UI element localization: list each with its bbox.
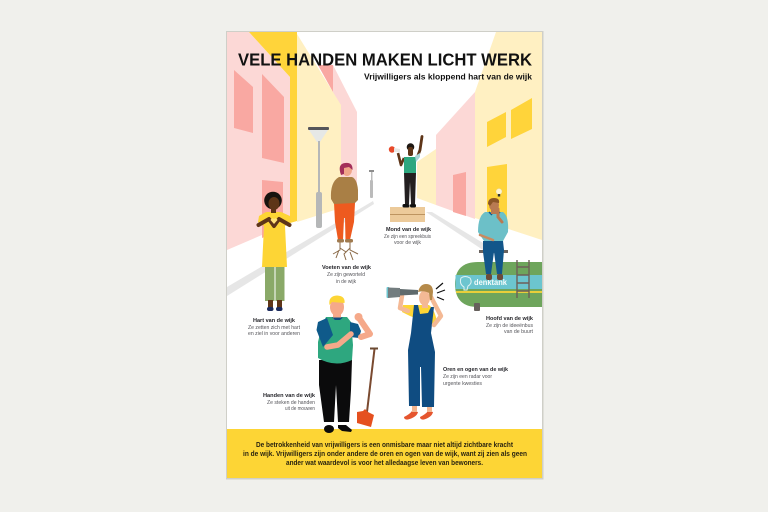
yellow line: [456, 291, 542, 293]
label: oren en ogen: [443, 367, 509, 387]
footer text: ander wat waardevol is voor het alledaagse leven van bewoners.: [286, 458, 483, 467]
label: handen: Ze steken de handen: [267, 400, 315, 406]
navy sleeves: [316, 318, 333, 347]
title: VELE HANDEN MAKEN LICHT WERK: [238, 50, 533, 70]
arm to ear: [431, 297, 441, 325]
label: handen: Handen van de wijk: [263, 393, 316, 399]
raised arm: [359, 318, 370, 337]
yellow building edge: [249, 32, 297, 223]
person: mond van de wijk: [389, 136, 425, 222]
ankles: [412, 405, 417, 412]
footer text: [243, 440, 527, 467]
label: hoofd: Hoofd van de wijk: [486, 316, 534, 322]
footer text: in de wijk. Vrijwilligers zijn onder andere de oren en ogen van de wijk, want zij zien als geen: [243, 449, 527, 458]
label: oren en ogen: Oren en ogen van de wijk: [443, 367, 509, 373]
label: hart: Ze zetten zich met hart: [248, 325, 300, 331]
shirt: [478, 212, 508, 241]
legs: [265, 266, 274, 301]
person: voeten van de wijk: [331, 163, 358, 260]
label: mond: Ze zijn een spreekbuis: [384, 234, 431, 240]
label: mond: [384, 227, 432, 246]
right curb: [426, 212, 488, 250]
tank band: [456, 275, 542, 289]
dress: [258, 212, 291, 267]
pink roof shadow: [318, 65, 333, 92]
label: hart: [248, 318, 300, 337]
head: [264, 192, 282, 209]
right door pink: [453, 172, 466, 216]
left door: [262, 180, 283, 238]
feet: [337, 239, 344, 242]
right window 2: [511, 98, 532, 139]
label: hart: Hart van de wijk: [253, 318, 296, 324]
label: oren en ogen: urgente kwesties: [443, 381, 482, 387]
person: hoofd van de wijk: [478, 189, 508, 280]
trousers: [319, 360, 352, 422]
legs: [483, 241, 504, 274]
person: oren en ogen van de wijk: [386, 283, 445, 420]
icon: big street lamp: [308, 127, 329, 228]
hair: [329, 296, 345, 305]
person: handen van de wijk: [316, 296, 378, 433]
overalls: [408, 305, 435, 407]
hand on chin: [498, 209, 502, 222]
torso: [404, 157, 416, 173]
label: hoofd: van de buurt: [504, 329, 533, 335]
footer banner: [227, 429, 542, 478]
left curb: [227, 201, 374, 296]
tank body: [455, 262, 542, 307]
right far cream building: [417, 149, 436, 205]
bench: [479, 250, 508, 253]
right pink building: [436, 92, 475, 219]
far left pink building: [318, 65, 357, 207]
head: [419, 290, 430, 306]
icon: brain: [460, 276, 471, 290]
label: handen: uit de mouwen: [285, 406, 315, 412]
head: [330, 298, 344, 316]
subtitle: Vrijwilligers als kloppend hart van de wijk: [364, 72, 532, 82]
roots: [333, 241, 358, 260]
left cream building: [297, 34, 341, 222]
label: hart: en ziel in voor anderen: [248, 331, 300, 337]
telescope: [386, 287, 418, 298]
trousers: [334, 203, 355, 240]
arm to telescope: [400, 296, 408, 311]
sweater: [331, 177, 358, 204]
label: voeten: Ze zijn geworteld: [327, 272, 365, 278]
torso: [318, 317, 353, 364]
megaphone: [389, 146, 395, 153]
left window 1: [234, 70, 253, 133]
lower arm: [480, 235, 493, 240]
person: hart van de wijk: [258, 192, 291, 311]
head: [489, 199, 499, 211]
label: mond: voor de wijk: [394, 240, 421, 246]
crossing arm: [327, 334, 351, 347]
tank foot: [474, 303, 480, 311]
label: voeten: in de wijk: [336, 279, 356, 285]
label: oren en ogen: Ze zijn een radar voor: [443, 374, 492, 380]
legs: [404, 173, 416, 204]
icon: small street lamp: [369, 170, 374, 198]
arms and heart hands: [258, 219, 290, 226]
label: voeten: Voeten van de wijk: [322, 265, 372, 271]
ladder: [517, 260, 529, 298]
arms: [417, 136, 422, 158]
right cream building: [475, 32, 542, 240]
shoes: [486, 274, 492, 280]
shoes: [324, 425, 334, 433]
street background: [227, 32, 542, 296]
left window 2: [262, 74, 284, 163]
footer text: De betrokkenheid van vrijwilligers is een onmisbare maar niet altijd zichtbare kracht: [256, 440, 514, 449]
denktank: [455, 260, 542, 311]
label: hoofd: Ze zijn de ideeënbus: [486, 323, 533, 329]
icon: light bulb: [496, 189, 502, 196]
shoes: [404, 411, 418, 420]
hair: [418, 284, 433, 300]
right door yellow: [487, 164, 507, 222]
left pink building: [227, 32, 290, 250]
yellow shirt: [402, 305, 437, 324]
label: handen: [263, 393, 316, 412]
label: voeten: [322, 265, 372, 285]
head: [342, 164, 352, 176]
shoes: [402, 204, 410, 208]
label: mond: Mond van de wijk: [386, 227, 432, 233]
shoes: [267, 307, 274, 311]
shovel: [357, 348, 378, 427]
collar: [489, 212, 500, 215]
head: [407, 143, 414, 151]
right window 1: [487, 112, 506, 147]
sound lines: [436, 283, 445, 300]
label: hoofd: [486, 316, 534, 335]
denktank label: denktank: [474, 277, 507, 287]
crate: [390, 207, 425, 222]
